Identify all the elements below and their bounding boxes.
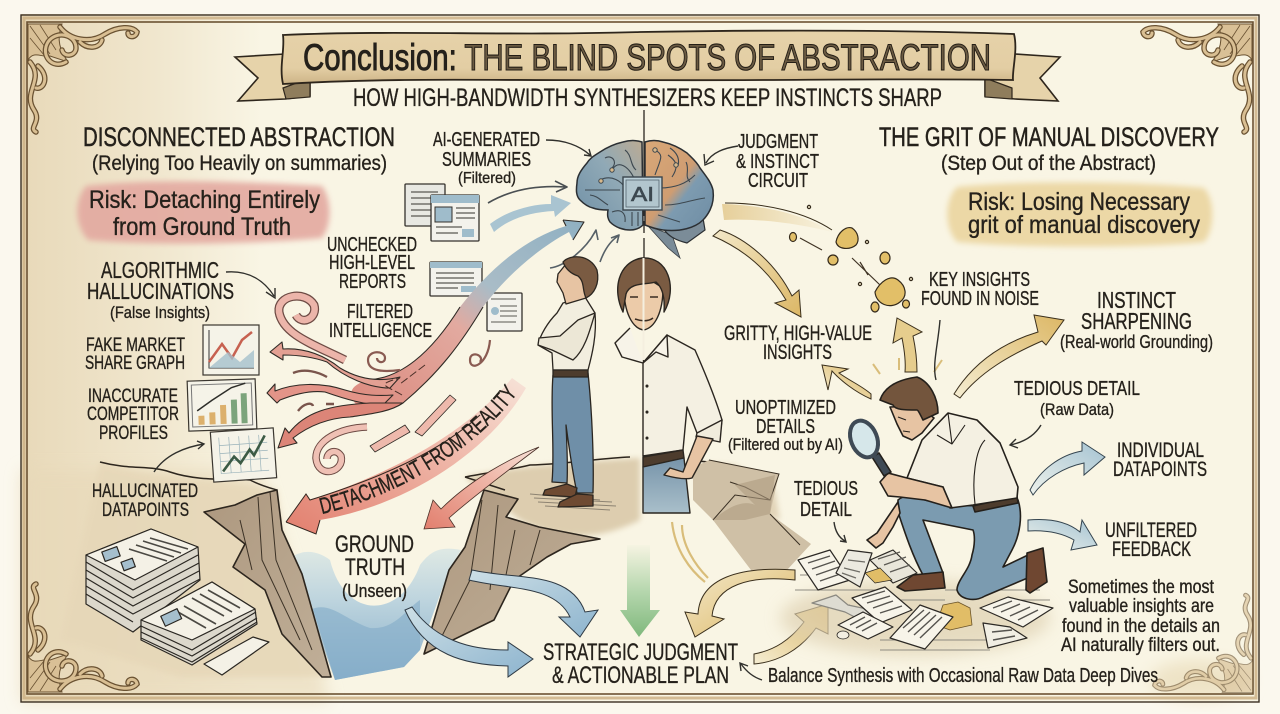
paper stacks (86, 529, 269, 675)
label: instinct sharpening: SHARPENING (1081, 308, 1192, 334)
label: ground truth: TRUTH (345, 554, 405, 581)
labels: center right (724, 131, 872, 521)
water (292, 549, 461, 680)
callout: risk losing (947, 183, 1212, 246)
ground and chasm (60, 457, 811, 680)
label: instinct sharpening: INSTINCT (1097, 287, 1176, 313)
paper B (836, 550, 872, 587)
callout: risk losing: Risk: Losing Necessary (968, 188, 1190, 216)
label: ai-generated summaries (433, 129, 540, 187)
right rock (693, 460, 811, 574)
belt (553, 370, 588, 377)
label: ai-generated summaries: SUMMARIES (442, 149, 531, 171)
hatching (795, 575, 1050, 650)
text block: sometimes: found in the details an (1062, 616, 1220, 637)
label: hallucinated datapoints: HALLUCINATED (92, 481, 198, 502)
corner ornament top-right (1143, 24, 1252, 132)
label: strategic judgment (543, 639, 738, 689)
person: standing man (530, 257, 616, 510)
label: individual datapoints: DATAPOINTS (1113, 458, 1207, 481)
label: instinct sharpening: (Real-world Grounding) (1060, 332, 1213, 352)
cerebellum (663, 218, 705, 243)
forearm and hand (880, 473, 952, 508)
label: key insights: KEY INSIGHTS (929, 269, 1030, 291)
label: unchecked reports: UNCHECKED (327, 234, 417, 256)
ground: center platform (465, 458, 640, 536)
brain right (645, 140, 713, 231)
label: filtered intelligence: FILTERED (347, 301, 413, 323)
callout: risk detaching: from Ground Truth (113, 213, 291, 241)
front boot (897, 572, 945, 591)
label: key insights: FOUND IN NOISE (921, 288, 1039, 310)
label: judgment circuit: CIRCUIT (748, 170, 808, 192)
label: filtered intelligence (329, 301, 432, 342)
label: gritty insights: INSIGHTS (763, 341, 832, 364)
label: tedious detail raw data (1014, 378, 1140, 419)
arrow: instinct sharpening (954, 315, 1064, 398)
label: fake market share graph: SHARE GRAPH (85, 353, 185, 374)
label: judgment circuit: & INSTINCT (736, 151, 819, 173)
face (624, 276, 663, 330)
label: inaccurate competitor profiles (87, 386, 179, 444)
arrow: sweep from reports (351, 220, 584, 408)
arrow: gold to plan (685, 569, 795, 637)
label: individual datapoints: INDIVIDUAL (1117, 439, 1204, 462)
label: ai-generated summaries: AI-GENERATED (433, 129, 540, 151)
label: hallucinated datapoints: DATAPOINTS (102, 500, 189, 521)
brain circuits (585, 148, 705, 226)
arrow: gold up (893, 318, 922, 372)
text block: balance: Balance Synthesis with Occasional Raw Data Deep Dives (768, 665, 1158, 687)
corner ornament top-left (28, 24, 137, 132)
right cliff wall (424, 490, 600, 654)
text block: sometimes: AI naturally filters out. (1061, 635, 1220, 656)
belt (643, 450, 684, 467)
label: ground truth: GROUND (335, 531, 414, 558)
shoes (543, 484, 577, 497)
labels: center left (327, 129, 738, 689)
paper G (983, 623, 1027, 648)
label: tedious detail: TEDIOUS (794, 478, 858, 500)
title ribbon (235, 31, 1060, 101)
corner ornament bottom-left (28, 584, 137, 692)
hair (880, 377, 938, 420)
text block: sometimes: Sometimes the most (1068, 577, 1215, 598)
paper E (890, 605, 953, 649)
jeans (552, 373, 593, 493)
text block: sometimes: valuable insights are (1069, 596, 1214, 617)
label: tedious detail raw data: TEDIOUS DETAIL (1014, 378, 1140, 400)
brain left (576, 140, 643, 230)
label: ground truth (335, 531, 414, 601)
label: unfiltered feedback (1105, 519, 1197, 561)
arrow: gold to gritty label (822, 365, 871, 399)
label: algorithmic hallucinations: HALLUCINATIONS (87, 278, 234, 304)
paper D (838, 612, 893, 639)
buttons (646, 386, 648, 438)
thin pointer arrows (154, 140, 1041, 680)
label: individual datapoints (1113, 439, 1207, 481)
scattered papers (795, 550, 1053, 650)
callout: risk detaching (77, 181, 330, 244)
label: ai-generated summaries: (Filtered) (458, 170, 516, 187)
label: unfiltered feedback: FEEDBACK (1112, 538, 1191, 561)
face and neck (557, 264, 586, 304)
hair (563, 257, 598, 298)
cuff (696, 420, 722, 442)
label: unchecked reports: REPORTS (339, 271, 406, 293)
icon: document 1 (405, 184, 445, 226)
magnifier handle (872, 453, 891, 476)
label: ground truth: (Unseen) (342, 581, 407, 601)
idea ticks (873, 358, 942, 374)
callout: risk detaching: Risk: Detaching Entirely (89, 186, 320, 214)
panel: disconnected abstraction heading (83, 122, 395, 175)
swirl: fragments (370, 395, 456, 452)
arrow: detachment from reality (286, 378, 526, 535)
swirl: pink curl 2 (316, 427, 367, 471)
icon: document 2 (431, 195, 479, 241)
brainstem (648, 226, 680, 258)
corner ornament bottom-right (1155, 595, 1253, 692)
paper F (980, 597, 1053, 627)
label: detachment: DETACHMENT FROM REALITY (319, 384, 515, 514)
label: gritty insights: GRITTY, HIGH-VALUE (724, 322, 872, 345)
label: fake market share graph: FAKE MARKET (86, 335, 185, 356)
label: unfiltered feedback: UNFILTERED (1105, 519, 1197, 542)
brain with AI chip (576, 110, 713, 513)
label: algorithmic hallucinations: (False Insights) (110, 303, 210, 322)
doc icons to brain (405, 184, 522, 331)
label: gritty insights (724, 322, 872, 364)
label: inaccurate competitor profiles: COMPETITOR (87, 404, 179, 425)
label: unoptimized details: (Filtered out by AI) (728, 435, 843, 454)
chart: fake market share (203, 325, 259, 375)
stack 1 (86, 529, 200, 632)
label: unoptimized details: UNOPTIMIZED (735, 397, 836, 419)
subheading: (Step Out of the Abstract) (941, 152, 1156, 175)
left ground edge (100, 462, 277, 490)
labels: right side (768, 269, 1220, 687)
subheading: (Relying Too Heavily on summaries) (92, 152, 387, 175)
left cliff wall (204, 490, 331, 677)
label: algorithmic hallucinations (87, 257, 234, 322)
split line (642, 258, 644, 360)
label: judgment circuit (736, 131, 819, 192)
label: key insights (921, 269, 1039, 310)
label: instinct sharpening (1060, 287, 1213, 352)
label: strategic judgment: & ACTIONABLE PLAN (552, 662, 729, 689)
chart: competitor profiles (187, 379, 257, 431)
swirl: small curls (368, 340, 490, 371)
person: center man (615, 258, 722, 513)
label: strategic judgment: STRATEGIC JUDGMENT (543, 639, 738, 666)
shirt (907, 413, 1018, 508)
swirl: pink curl 1 (279, 296, 345, 360)
icon: filtered document (487, 293, 522, 331)
gold rock small (865, 568, 892, 583)
arrow: gold from papers (754, 604, 828, 664)
label: unchecked reports: HIGH-LEVEL (329, 252, 415, 274)
loose sheet (204, 637, 269, 675)
heading: DISCONNECTED ABSTRACTION (83, 122, 395, 152)
face (890, 406, 934, 440)
ground: left shade (60, 462, 330, 677)
arrow: small gold arcs (672, 522, 708, 582)
arrow: blue to plan 1 (469, 570, 598, 637)
label: inaccurate competitor profiles: PROFILES (99, 423, 168, 444)
forearm (664, 436, 713, 479)
arrow: summaries thick (490, 195, 571, 232)
label: filtered intelligence: INTELLIGENCE (329, 320, 432, 342)
label: unoptimized details (728, 397, 843, 454)
arrow: small to brain (550, 230, 619, 268)
jeans (643, 458, 690, 513)
arrow: green center (620, 545, 660, 637)
arm (538, 313, 595, 360)
shirt (643, 335, 722, 456)
label: inaccurate competitor profiles: INACCURATE (88, 386, 178, 407)
label: tedious detail: DETAIL (800, 499, 852, 521)
paper A (798, 550, 850, 590)
arrow: brain to gritty (713, 230, 801, 317)
charts (187, 325, 277, 482)
gold rock (936, 602, 972, 630)
panel: grit heading (879, 122, 1219, 175)
arrows from ground truth (405, 570, 598, 677)
facial features (630, 297, 658, 321)
arrow: blue unfiltered feedback (1028, 520, 1097, 550)
arrow: blue individual datapoints (1030, 442, 1105, 495)
label: algorithmic hallucinations: ALGORITHMIC (101, 257, 219, 283)
shadow hatching (530, 494, 616, 510)
label: unchecked reports (327, 234, 417, 293)
reaching arm (867, 502, 900, 548)
paper C (852, 587, 912, 623)
magnifier lens (845, 417, 883, 461)
person: kneeling man (845, 377, 1047, 599)
jeans (898, 496, 1030, 599)
belt (973, 496, 1018, 512)
arrow: red 1 (270, 342, 400, 388)
labels: left side (85, 257, 234, 521)
title: Conclusion: THE BLIND SPOTS OF ABSTRACTION (303, 37, 991, 78)
chart: hallucinated datapoints (210, 428, 277, 482)
text block: sometimes (1061, 577, 1220, 656)
collar (615, 328, 668, 363)
hair (618, 258, 670, 312)
subtitle: HOW HIGH-BANDWIDTH SYNTHESIZERS KEEP INSTINCTS SHARP (353, 84, 942, 112)
callout: risk losing: grit of manual discovery (968, 211, 1200, 239)
center divider (643, 110, 645, 258)
arrow: brain to nuggets (722, 203, 832, 232)
arrow: red 3 (278, 403, 403, 448)
icon: report (430, 262, 482, 296)
label: fake market share graph (85, 335, 185, 374)
ground shadow under kneeling man (780, 580, 1050, 656)
label: tedious detail (794, 478, 858, 521)
arrow: blue to plan 2 (405, 607, 533, 677)
data sweep to brain and red arrows (267, 181, 619, 471)
arrow: summaries thin (488, 181, 567, 203)
stack 2 (141, 582, 257, 665)
arrow: red 2 (267, 384, 393, 405)
rear boot (1026, 548, 1047, 593)
AI chip: AI (631, 184, 654, 206)
shirt (538, 297, 595, 370)
label: hallucinated datapoints (92, 481, 198, 521)
label: unoptimized details: DETAILS (756, 416, 815, 438)
label: tedious detail raw data: (Raw Data) (1040, 400, 1114, 419)
label: judgment circuit: JUDGMENT (738, 131, 818, 153)
gold nuggets (790, 205, 913, 312)
arrow: red to ground truth (424, 447, 539, 529)
AI chip (623, 177, 662, 210)
